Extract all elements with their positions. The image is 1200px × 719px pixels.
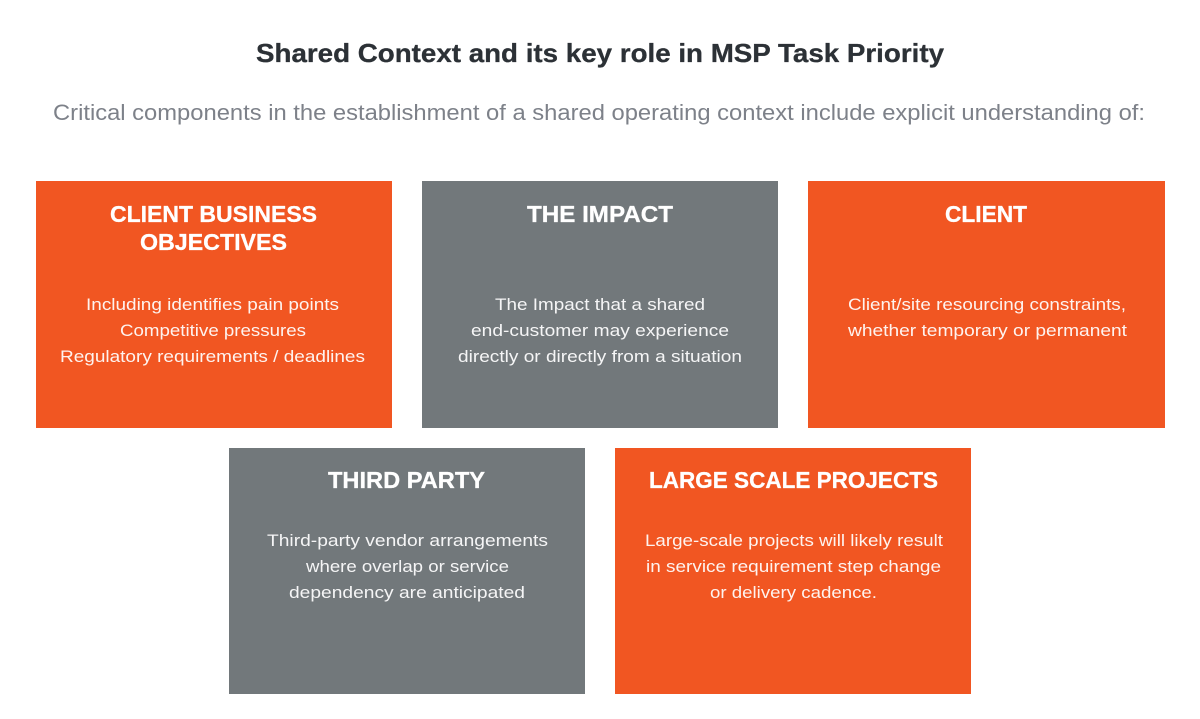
text: large scale projects details [645, 531, 943, 602]
text: third party details [267, 531, 548, 602]
heading: client: CLIENT [945, 201, 1027, 227]
heading: client business objectives: OBJECTIVES [140, 229, 287, 255]
text: large scale projects details: or delivery cadence. [710, 583, 877, 602]
text: client business objectives details [60, 295, 365, 366]
text: client business objectives details: Including identifies pain points [86, 295, 339, 314]
text: client business objectives details: Regulatory requirements / deadlines [60, 347, 365, 366]
text: third party details: dependency are anticipated [289, 583, 525, 602]
text: client business objectives details: Competitive pressures [120, 321, 306, 340]
text: the impact details [458, 295, 742, 366]
text: client details: Client/site resourcing constraints, [848, 295, 1126, 314]
panel: third party [229, 448, 585, 694]
text: client details [847, 295, 1127, 340]
panel: large scale projects [615, 448, 971, 694]
text: third party details: where overlap or service [305, 557, 509, 576]
heading: client business objectives [110, 201, 317, 255]
heading: large scale projects: LARGE SCALE PROJECTS [649, 467, 938, 493]
text: large scale projects details: Large-scale projects will likely result [645, 531, 943, 550]
heading: the impact: THE IMPACT [527, 201, 673, 227]
text: third party details: Third-party vendor arrangements [267, 531, 548, 550]
heading: third party: THIRD PARTY [328, 467, 485, 493]
text: the impact details: The Impact that a shared [495, 295, 705, 314]
panel: client business objectives [36, 181, 392, 428]
panel: the impact [422, 181, 778, 428]
title: Shared Context and its key role in MSP Task Priority [256, 38, 945, 68]
text: large scale projects details: in service requirement step change [646, 557, 941, 576]
text: the impact details: end-customer may experience [471, 321, 729, 340]
text: the impact details: directly or directly from a situation [458, 347, 742, 366]
subtitle: Critical components in the establishment of a shared operating context include explicit understanding of: [53, 100, 1145, 125]
heading: client business objectives: CLIENT BUSINESS [110, 201, 317, 227]
text: client details: whether temporary or permanent [847, 321, 1127, 340]
panel: client [808, 181, 1165, 428]
